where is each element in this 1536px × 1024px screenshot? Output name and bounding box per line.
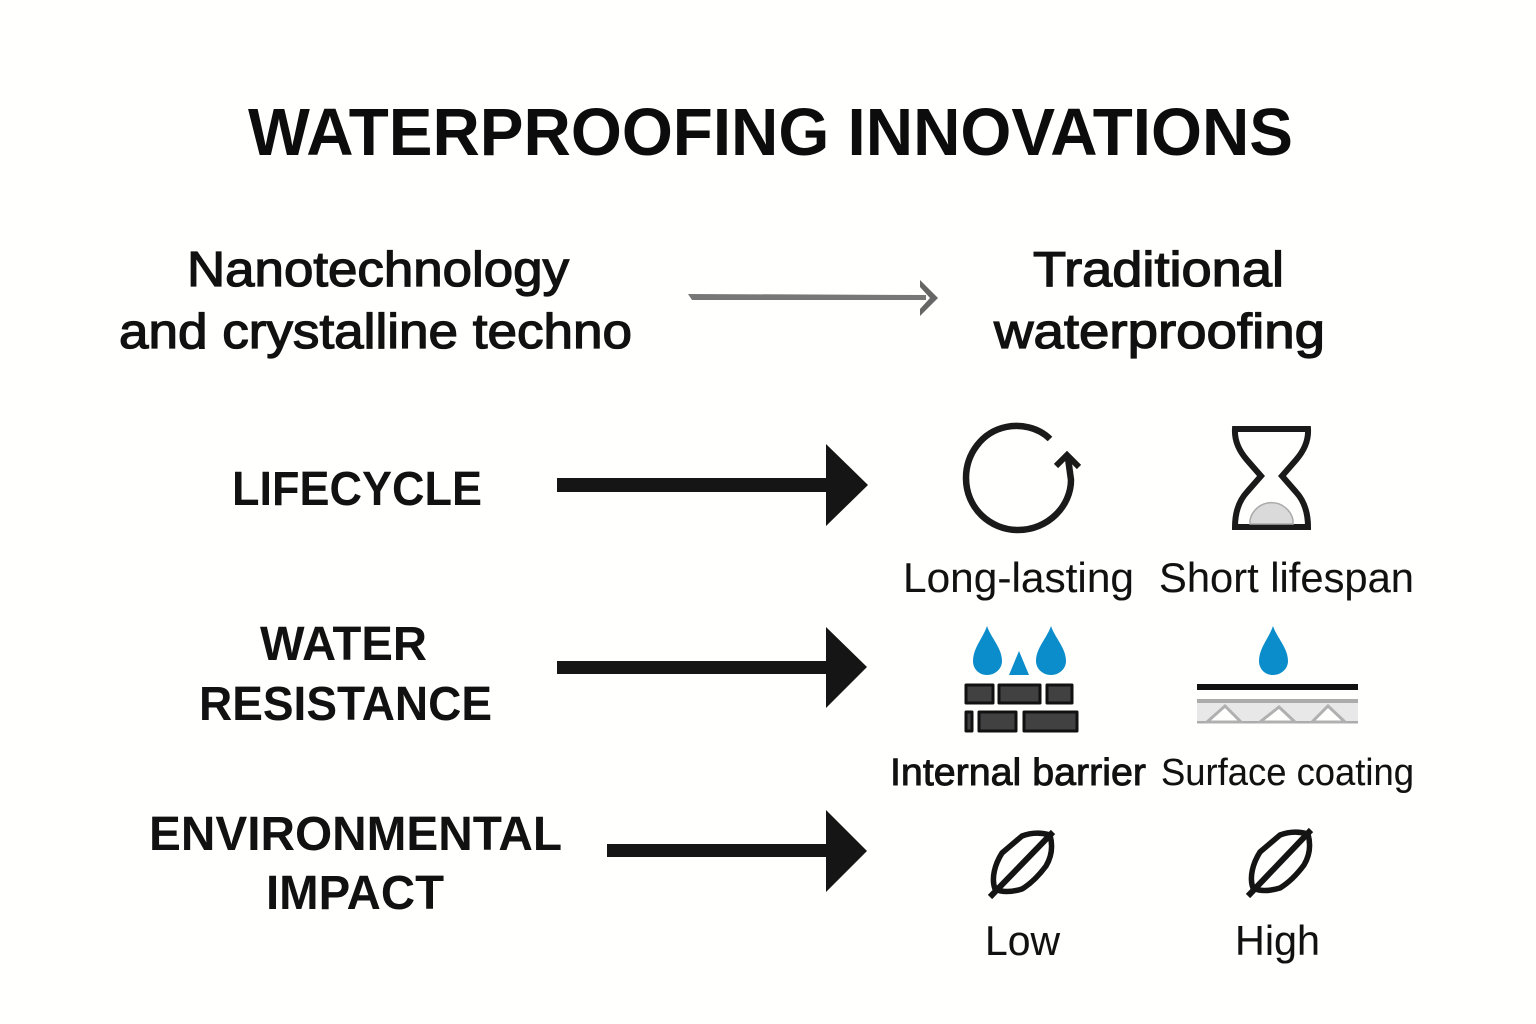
label: surface coating: Surface coating bbox=[1161, 752, 1414, 794]
icon: leaf high bbox=[1248, 830, 1311, 896]
arrow: environmental impact bbox=[607, 810, 867, 892]
icon: water drop over surface coating bbox=[1197, 626, 1358, 724]
arrow: water resistance bbox=[557, 627, 867, 708]
column heading: traditional waterproofing: waterproofing bbox=[993, 305, 1325, 359]
label: short lifespan: Short lifespan bbox=[1159, 554, 1414, 601]
row label: environmental impact: ENVIRONMENTAL bbox=[149, 808, 562, 861]
icon: water drops over brick wall bbox=[966, 626, 1077, 731]
column heading: nanotechnology: Nanotechnology bbox=[187, 243, 570, 297]
label: low: Low bbox=[985, 917, 1061, 964]
row label: water resistance bbox=[199, 618, 492, 731]
icon: hourglass bbox=[1235, 429, 1308, 527]
label: high: High bbox=[1235, 917, 1320, 964]
label: long-lasting: Long-lasting bbox=[903, 554, 1134, 601]
row label: lifecycle: LIFECYCLE bbox=[232, 463, 482, 516]
column heading: nanotechnology: and crystalline techno bbox=[119, 305, 632, 359]
label: internal barrier: Internal barrier bbox=[890, 752, 1146, 794]
row label: environmental impact bbox=[149, 808, 562, 920]
icon: circular arrow bbox=[966, 426, 1079, 530]
row label: water resistance: RESISTANCE bbox=[199, 678, 492, 731]
column heading: nanotechnology bbox=[119, 243, 632, 359]
icon: leaf low bbox=[990, 832, 1053, 897]
column heading: traditional waterproofing bbox=[993, 243, 1325, 359]
arrow: lifecycle bbox=[557, 444, 868, 526]
title: WATERPROOFING INNOVATIONS bbox=[248, 95, 1293, 170]
row label: environmental impact: IMPACT bbox=[266, 867, 444, 920]
arrow: comparison header bbox=[688, 280, 938, 316]
row label: water resistance: WATER bbox=[260, 618, 427, 671]
column heading: traditional waterproofing: Traditional bbox=[1033, 243, 1284, 297]
